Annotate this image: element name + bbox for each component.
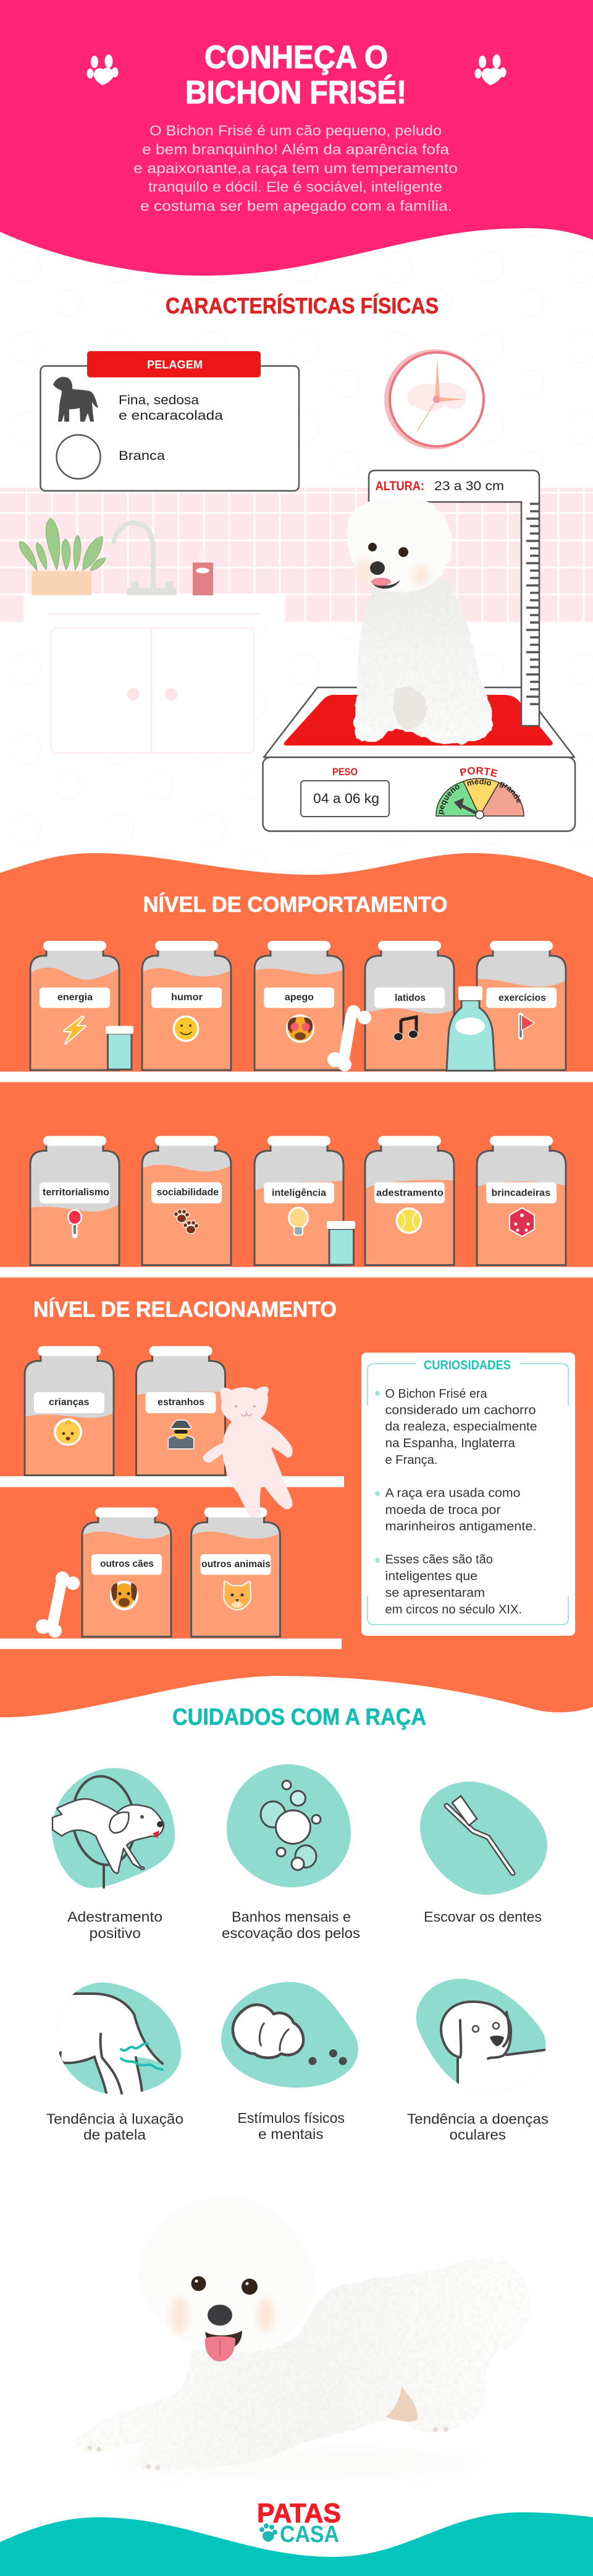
jar: outros cães: outros cães bbox=[100, 1559, 154, 1569]
jar: energia: energia bbox=[57, 992, 93, 1003]
shelf 2 bbox=[0, 1267, 593, 1277]
jar: energia bbox=[30, 941, 119, 1070]
fact 1: O Bichon Frisé era bbox=[385, 1387, 487, 1401]
logo paw bbox=[259, 2523, 277, 2542]
background: kitchen tiles and counter bbox=[0, 488, 593, 753]
title: BICHON FRISÉ! bbox=[185, 75, 406, 111]
title: CONHEÇA O bbox=[204, 40, 388, 75]
height value: 23 a 30 cm bbox=[434, 479, 504, 493]
icon: dice bbox=[510, 1209, 534, 1236]
jar: inteligência: inteligência bbox=[272, 1188, 326, 1198]
scale plate bbox=[264, 687, 574, 757]
jar: humor: humor bbox=[171, 992, 203, 1003]
jar: humor bbox=[142, 941, 231, 1070]
fact 3: inteligentes que bbox=[385, 1570, 477, 1583]
icon: spy bbox=[169, 1421, 193, 1448]
care label: patela: Tendência à luxação bbox=[46, 2111, 183, 2127]
size gauge: grande bbox=[499, 781, 521, 803]
jar: apego bbox=[254, 941, 343, 1070]
care item: patela bbox=[46, 1983, 183, 2143]
care item: estímulos bbox=[221, 1982, 358, 2142]
coat texture text bbox=[119, 393, 223, 423]
size label: PORTE bbox=[460, 767, 498, 778]
icon: clock bbox=[384, 349, 484, 449]
jar: sociabilidade: sociabilidade bbox=[157, 1187, 219, 1198]
fact 1: na Espanha, Inglaterra bbox=[385, 1437, 516, 1450]
small teal jar row 2 bbox=[327, 1221, 355, 1265]
care item: adestramento bbox=[52, 1768, 175, 1941]
care label: oculares: Tendência a doenças bbox=[407, 2111, 549, 2127]
icon: soap bottle bbox=[193, 548, 213, 595]
icon: white color swatch bbox=[57, 435, 100, 478]
care label: banhos: escovação dos pelos bbox=[222, 1925, 360, 1941]
care label: estímulos bbox=[237, 2110, 345, 2142]
coat color text: Branca bbox=[119, 449, 165, 463]
illustration: pink teddy bear bbox=[203, 1387, 293, 1518]
small teal jar row 1 bbox=[106, 1026, 133, 1069]
panel: scale with height ruler bbox=[262, 470, 576, 832]
jar: estranhos: estranhos bbox=[158, 1397, 204, 1408]
red mat bbox=[284, 695, 553, 746]
icon: faucet bbox=[114, 523, 177, 595]
photo: sitting bichon bbox=[347, 496, 492, 744]
icon: tennis ball bbox=[395, 1207, 423, 1234]
section: orange background bbox=[0, 853, 593, 1717]
fact 2: A raça era usada como bbox=[385, 1486, 520, 1500]
icon: dog silhouette bbox=[53, 376, 98, 422]
jar: territorialismo bbox=[30, 1136, 119, 1265]
heading: cuidados com a raça: CUIDADOS COM A RAÇA bbox=[172, 1704, 426, 1730]
fact 1: da realeza, especialmente bbox=[385, 1420, 537, 1434]
care label: patela: de patela bbox=[83, 2127, 146, 2143]
photo: lying bichon bbox=[76, 2196, 530, 2475]
footer wave bbox=[0, 2512, 593, 2576]
jar: brincadeiras: brincadeiras bbox=[492, 1188, 550, 1198]
care label: adestramento: positivo bbox=[89, 1925, 141, 1941]
shelf 4 bbox=[0, 1638, 342, 1649]
header panel bbox=[0, 0, 593, 276]
icon: smiley bbox=[173, 1015, 199, 1042]
care label: oculares bbox=[407, 2111, 549, 2143]
shelf 3 bbox=[0, 1476, 344, 1487]
jar: adestramento bbox=[365, 1136, 454, 1265]
jar: exercícios: exercícios bbox=[498, 993, 546, 1003]
care label: oculares: oculares bbox=[450, 2127, 506, 2143]
care label: patela bbox=[46, 2111, 183, 2143]
care label: estímulos: e mentais bbox=[258, 2126, 324, 2142]
care label: adestramento: Adestramento bbox=[67, 1909, 162, 1925]
fact 2: marinheiros antigamente. bbox=[385, 1520, 536, 1533]
fact 2 bbox=[375, 1486, 536, 1533]
weight box bbox=[301, 781, 389, 817]
jar: estranhos bbox=[136, 1346, 225, 1475]
intro text: tranquilo e dócil. Ele é sociável, inteligente bbox=[148, 179, 442, 195]
icon: cat face bbox=[224, 1582, 250, 1609]
icon: paw left bbox=[86, 54, 119, 85]
coat texture text: e encaracolada bbox=[119, 409, 223, 423]
fact 1: e França. bbox=[385, 1453, 437, 1467]
icon: bone 2 bbox=[36, 1571, 80, 1638]
icon: paw right bbox=[474, 54, 507, 85]
pelagem heading: PELAGEM bbox=[147, 359, 203, 371]
weight label: PESO bbox=[332, 766, 358, 778]
care label: estímulos: Estímulos físicos bbox=[237, 2110, 345, 2126]
care label: adestramento bbox=[67, 1909, 162, 1941]
pelagem tab bbox=[87, 351, 261, 377]
logo: patas da casa bbox=[257, 2498, 341, 2548]
jar: crianças: crianças bbox=[49, 1397, 90, 1408]
jar: apego: apego bbox=[285, 992, 314, 1003]
heading: nível de comportamento: NÍVEL DE COMPORTAMENTO bbox=[143, 892, 447, 917]
jar: sociabilidade bbox=[142, 1136, 231, 1265]
scale base bbox=[263, 757, 575, 831]
fact 2: moeda de troca por bbox=[385, 1503, 501, 1517]
jar: exercícios bbox=[477, 941, 566, 1070]
icon: dog face bbox=[110, 1581, 138, 1610]
curiosidades heading: CURIOSIDADES bbox=[424, 1358, 511, 1372]
intro text bbox=[133, 122, 458, 214]
intro text: e apaixonante,a raça tem um temperamento bbox=[133, 160, 458, 176]
care label: banhos: Banhos mensais e bbox=[232, 1909, 351, 1925]
jar: territorialismo: territorialismo bbox=[43, 1187, 109, 1198]
icon: bone 1 bbox=[327, 1005, 371, 1071]
icon: baby bbox=[54, 1418, 82, 1445]
intro text: e costuma ser bem apegado com a família. bbox=[140, 198, 452, 214]
jar: latidos: latidos bbox=[395, 993, 426, 1003]
jar: outros cães bbox=[82, 1507, 171, 1637]
intro text: e bem branquinho! Além da aparência fofa bbox=[142, 141, 449, 157]
fact 1: considerado um cachorro bbox=[385, 1403, 536, 1417]
heading: nível de relacionamento: NÍVEL DE RELACIONAMENTO bbox=[33, 1297, 337, 1322]
icon: dog with heart eyes bbox=[286, 1014, 314, 1043]
shelf 1 bbox=[0, 1072, 593, 1082]
icon: pin bbox=[67, 1209, 82, 1236]
panel: pelagem bbox=[41, 351, 299, 491]
card inner border bbox=[368, 1364, 568, 1625]
logo casa: CASA bbox=[280, 2522, 339, 2548]
care item: banhos bbox=[222, 1764, 360, 1941]
heading: características físicas: CARACTERÍSTICAS FÍSICAS bbox=[166, 293, 439, 318]
icon: plant bbox=[19, 518, 106, 595]
jar: outros animais: outros animais bbox=[201, 1559, 271, 1570]
jar: outros animais bbox=[191, 1507, 280, 1637]
weight box: 04 a 06 kg bbox=[313, 791, 379, 806]
height label: ALTURA: bbox=[376, 479, 424, 493]
teal bottle bbox=[447, 987, 495, 1071]
jar: brincadeiras bbox=[477, 1136, 566, 1265]
jar: adestramento: adestramento bbox=[376, 1188, 444, 1198]
title bbox=[185, 40, 406, 111]
size gauge: médio bbox=[467, 778, 491, 786]
intro text: O Bichon Frisé é um cão pequeno, peludo bbox=[149, 122, 442, 138]
fact 3: em circos no século XIX. bbox=[385, 1603, 522, 1617]
jar: latidos bbox=[365, 941, 454, 1070]
jar: inteligência bbox=[254, 1136, 343, 1265]
coat texture text: Fina, sedosa bbox=[119, 393, 199, 407]
ruler ticks bbox=[526, 504, 539, 704]
size gauge bbox=[435, 778, 524, 820]
logo: patas da casa: PATAS bbox=[257, 2498, 341, 2528]
fact 1 bbox=[375, 1387, 537, 1467]
fact 3: se apresentaram bbox=[385, 1586, 485, 1600]
care item: oculares bbox=[407, 1979, 556, 2143]
icon: light bulb bbox=[288, 1207, 309, 1236]
icon: music notes bbox=[394, 1017, 418, 1040]
care label: banhos bbox=[222, 1909, 360, 1941]
size gauge: pequeno bbox=[439, 785, 460, 815]
care label: dentes: Escovar os dentes bbox=[424, 1909, 542, 1925]
icon: flag bbox=[521, 1015, 534, 1037]
panel: curiosidades bbox=[361, 1353, 575, 1636]
jar: crianças bbox=[25, 1346, 114, 1475]
height ruler bbox=[369, 470, 539, 726]
care item: dentes bbox=[420, 1782, 547, 1925]
icon: paw prints bbox=[174, 1210, 198, 1233]
fact 3: Esses cães são tão bbox=[385, 1553, 493, 1566]
icon: lightning bbox=[64, 1017, 85, 1044]
fact 3 bbox=[375, 1553, 522, 1617]
